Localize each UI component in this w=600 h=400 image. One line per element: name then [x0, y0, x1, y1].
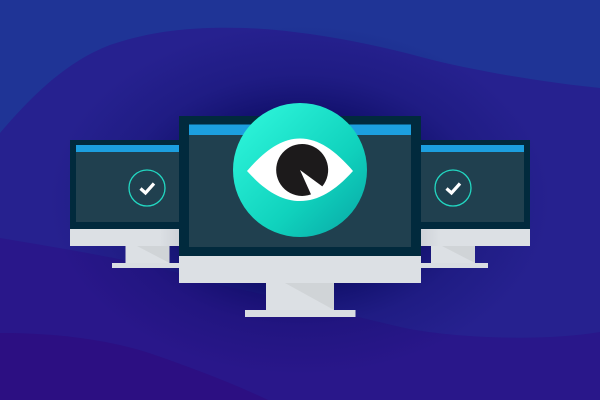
center monitor frame — [179, 116, 421, 256]
left monitor frame — [70, 140, 182, 229]
eye white — [247, 138, 353, 201]
right monitor chin — [418, 229, 530, 246]
monitor: left — [70, 140, 182, 268]
right monitor neck — [431, 246, 475, 263]
center monitor base — [245, 310, 356, 317]
right monitor screen — [418, 145, 524, 222]
left monitor screen — [76, 145, 182, 222]
icon: eye badge — [233, 103, 367, 237]
center monitor title bar — [189, 124, 411, 135]
right monitor frame — [418, 140, 530, 229]
right monitor title bar — [418, 145, 524, 152]
center monitor neck — [266, 283, 334, 310]
right monitor base — [418, 263, 488, 268]
center monitor screen — [189, 124, 411, 247]
pupil with wedge — [276, 144, 328, 196]
teal circle — [233, 103, 367, 237]
center monitor chin — [179, 256, 421, 283]
icon: left check badge — [129, 170, 165, 206]
left monitor neck — [126, 246, 170, 263]
left monitor chin — [70, 229, 182, 246]
monitor: center — [179, 116, 421, 317]
monitor: right — [418, 140, 530, 268]
icon: right check badge — [435, 170, 471, 206]
left monitor base — [112, 263, 182, 268]
left monitor title bar — [76, 145, 182, 152]
